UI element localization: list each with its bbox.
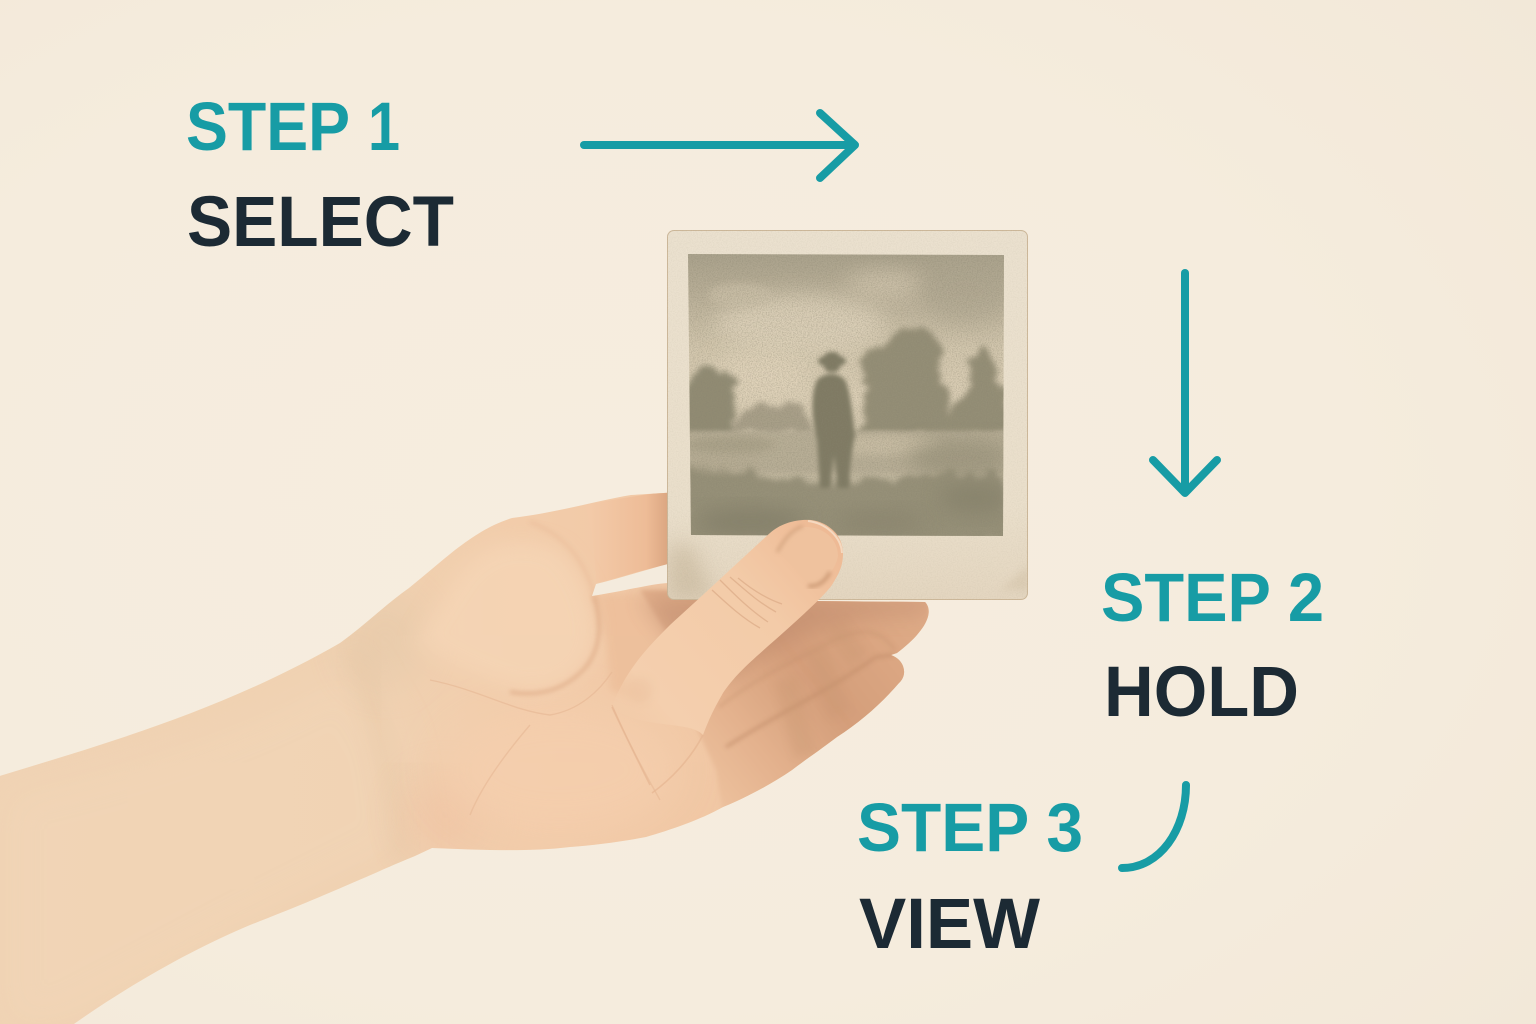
dim reflection bbox=[908, 438, 1012, 478]
palm below index bbox=[599, 594, 662, 690]
nail rim bbox=[808, 521, 842, 553]
step 3 label bbox=[857, 789, 1083, 964]
step 2 label bbox=[1101, 559, 1324, 732]
step 1 action: SELECT bbox=[187, 183, 454, 262]
palm lines bbox=[430, 672, 660, 815]
step 1 word: STEP bbox=[186, 88, 350, 165]
step 3 action: VIEW bbox=[859, 885, 1040, 964]
reflection left bbox=[690, 438, 770, 452]
nail lower shadow bbox=[808, 572, 830, 586]
mid trees bbox=[730, 404, 815, 435]
curved arrow stroke to step 3 bbox=[1122, 785, 1186, 868]
finger joint shade bbox=[785, 625, 860, 755]
step 3 number: STEP 3 bbox=[857, 789, 1083, 866]
clouds bbox=[715, 295, 885, 355]
trees left bbox=[689, 362, 741, 437]
index finger bbox=[619, 492, 667, 577]
shadow under photo bbox=[645, 596, 924, 670]
thumb base mark bbox=[628, 678, 652, 702]
foreground bbox=[685, 468, 1007, 540]
finger divider 1 bbox=[719, 632, 895, 707]
thumb details bbox=[712, 520, 843, 628]
foreground dark patches bbox=[704, 507, 794, 536]
nail shadow bbox=[777, 526, 803, 552]
foreground light patches bbox=[694, 465, 728, 474]
arrow: down to step 2 bbox=[1153, 273, 1217, 493]
photo grain bbox=[688, 254, 1004, 484]
picture area bbox=[678, 250, 1012, 540]
arrow: step 1 to photo bbox=[584, 113, 855, 178]
palm tone bbox=[440, 705, 680, 835]
arm shading bbox=[0, 660, 410, 1024]
hand holding photo bbox=[0, 480, 950, 1024]
step 1 label bbox=[186, 88, 454, 262]
thumb over photo bbox=[612, 520, 843, 735]
step 2 number: STEP 2 bbox=[1101, 559, 1324, 636]
sky bbox=[685, 250, 1007, 540]
step 1 numeral: 1 bbox=[368, 88, 400, 165]
wrist shadow bbox=[355, 650, 402, 860]
finger divider 2 bbox=[726, 655, 893, 747]
fingers bbox=[640, 590, 930, 815]
thumbnail bbox=[777, 527, 838, 588]
figure bbox=[812, 352, 855, 488]
card grain bbox=[667, 230, 1028, 600]
water bbox=[685, 431, 1007, 473]
hand: palm, arm and fingers bbox=[0, 480, 950, 1024]
thumb mound bbox=[491, 550, 588, 681]
thumb web crease bbox=[612, 707, 703, 793]
card face bbox=[668, 231, 1027, 599]
trees right bbox=[860, 328, 1007, 437]
card corner wear bbox=[1010, 572, 1027, 588]
heel of palm flush bbox=[405, 775, 485, 855]
card edge bbox=[667, 230, 1028, 600]
bright water strip bbox=[853, 435, 926, 454]
thumb shape bbox=[612, 520, 843, 735]
mound to index crease bbox=[530, 522, 596, 600]
aged edges bbox=[667, 230, 1030, 600]
infographic canvas bbox=[0, 102, 1322, 1024]
polaroid photo bbox=[667, 230, 1030, 600]
step 2 action: HOLD bbox=[1104, 653, 1299, 732]
gap between index finger and palm bbox=[592, 564, 668, 596]
mound crease bbox=[510, 596, 599, 694]
knuckle wrinkles bbox=[712, 577, 782, 628]
wrist top shade bbox=[347, 595, 423, 685]
